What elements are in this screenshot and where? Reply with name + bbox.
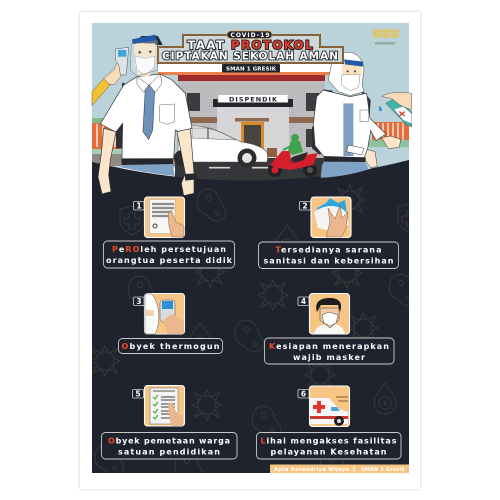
backpack (116, 80, 179, 148)
badge 5: 5 (135, 390, 141, 399)
label 2: sanitasi dan kebersihan (264, 256, 394, 266)
label 6: pelayanan Kesehatan (270, 448, 387, 456)
tie (143, 83, 155, 139)
label 1 (104, 241, 234, 268)
road (175, 158, 335, 182)
step 1 (104, 197, 234, 268)
belt (121, 158, 173, 165)
pants (321, 162, 369, 178)
badge 1: 1 (136, 202, 142, 211)
school pill: SMAN 1 GRESIK (226, 66, 277, 72)
label 2 (258, 242, 398, 268)
label 3: Obyek thermogun (122, 342, 220, 351)
card 6 icon: ambulance (310, 386, 350, 426)
label 5 (102, 432, 237, 459)
badge 2: 2 (302, 202, 308, 211)
poster sheet (80, 12, 420, 489)
step 4 (264, 294, 394, 364)
footer credit: Apta Rasendriya Wijaya (274, 467, 349, 473)
thermogun (115, 47, 129, 75)
label 1: orangtua peserta didik (106, 256, 233, 265)
step 5 (102, 386, 237, 459)
sanitizer bottle and hand (379, 92, 412, 127)
covid pill: COVID-19 (230, 32, 270, 39)
badge 6: 6 (301, 390, 306, 399)
label 6 (256, 432, 401, 459)
right student (312, 52, 401, 178)
title banner (158, 31, 343, 72)
vest stripe (343, 103, 353, 156)
face (342, 63, 362, 77)
building (158, 63, 340, 162)
school pill (222, 64, 280, 72)
step 3 (118, 294, 222, 354)
sky background (92, 23, 409, 168)
card 3 icon: thermogun (144, 294, 184, 334)
badge 6 (298, 390, 309, 399)
sleeve cuff (347, 145, 364, 155)
footer credit (270, 464, 409, 473)
label 1: PeROleh persetujuan (112, 245, 226, 254)
label 4: Kesiapan menerapkan (269, 342, 389, 351)
badge 4: 4 (301, 297, 306, 306)
belt (323, 156, 366, 162)
hands (357, 136, 401, 167)
label 6: Lihai mengakses fasilitas (260, 436, 397, 446)
hand holding thermogun (89, 55, 128, 106)
car (174, 126, 277, 168)
shirt (100, 74, 192, 159)
dark lower panel (92, 160, 409, 473)
right fence (368, 122, 409, 147)
collar (137, 74, 162, 92)
taat protokol heading: TAAT PROTOKOL (188, 38, 313, 52)
banner frame (158, 35, 343, 63)
label 4: wajib masker (293, 353, 365, 362)
backpack (312, 89, 371, 155)
pocket (160, 104, 175, 124)
left student (98, 74, 197, 196)
label 5: Obyek pemetaan warga (108, 436, 230, 446)
pocket (360, 110, 368, 122)
logo top right (373, 29, 399, 44)
sekolah aman heading: CIPTAKAN SEKOLAH AMAN (162, 50, 338, 62)
background virus pattern (90, 185, 422, 484)
step 2 (258, 197, 398, 268)
card 5 icon: checklist (144, 386, 184, 426)
left fence (92, 118, 182, 166)
card 4 icon: masked face (310, 294, 350, 334)
arms (98, 128, 194, 196)
left student head (130, 35, 163, 76)
pants (122, 164, 175, 176)
badge 3: 3 (136, 297, 142, 306)
label 5: satuan pendidikan (118, 448, 220, 456)
step 6 (256, 386, 401, 459)
footer credit: SMAN 1 Gresik (361, 467, 406, 473)
card 1 icon: document and hand (144, 197, 184, 238)
label 2: Tersedianya sarana (276, 246, 382, 254)
building sign: DISPENDIK (229, 96, 278, 104)
card 2 icon: washing hands (311, 197, 351, 238)
suit (313, 90, 386, 158)
label 4 (264, 338, 394, 364)
motorcycle rider (268, 134, 318, 177)
watch (185, 173, 197, 181)
hood (328, 52, 364, 96)
